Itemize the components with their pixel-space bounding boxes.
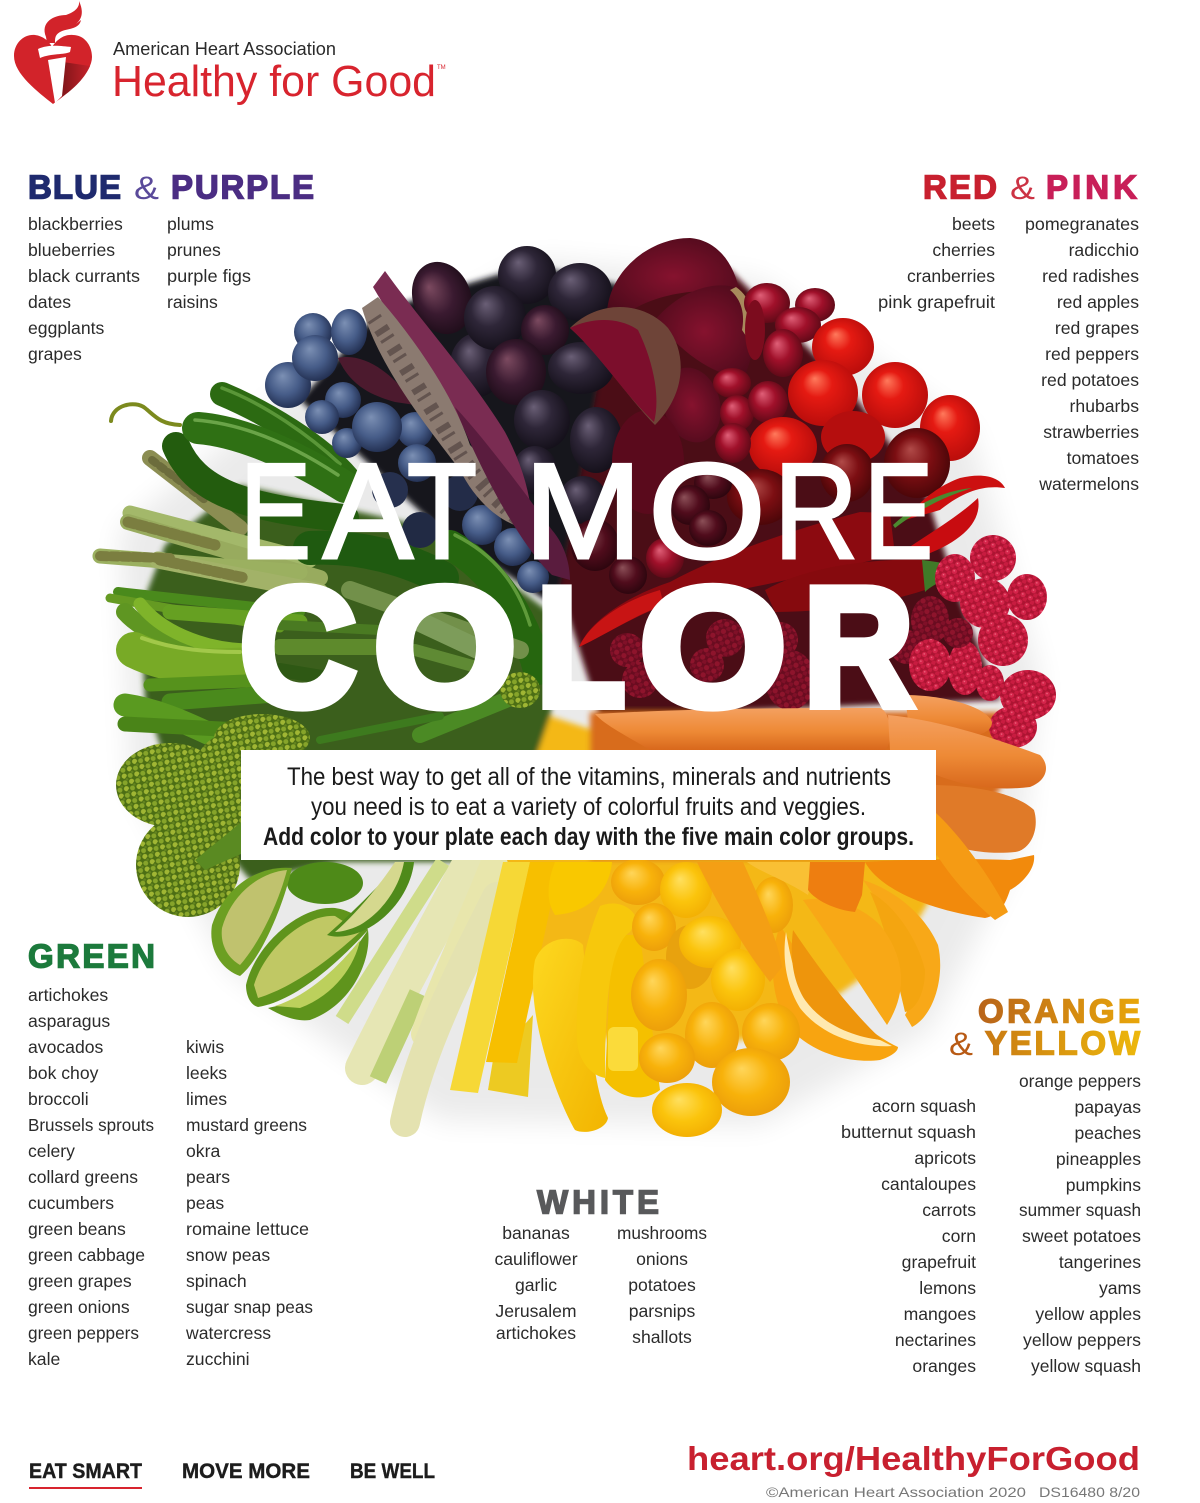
list column 2: tangerines — [1059, 1252, 1141, 1272]
logo — [14, 1, 446, 106]
list column 1: green grapes — [28, 1271, 132, 1291]
list column 2: orange peppers — [1019, 1071, 1141, 1091]
list column 1: cantaloupes — [881, 1174, 976, 1194]
list column 2: pumpkins — [1066, 1175, 1141, 1195]
list column 1 — [878, 214, 995, 312]
list column 2: yellow peppers — [1023, 1330, 1141, 1350]
footer — [29, 1440, 1140, 1500]
red chili peppers — [579, 476, 1005, 647]
list column 2: mushrooms — [617, 1223, 707, 1243]
list column 1: nectarines — [895, 1330, 976, 1350]
panel: produce circle — [100, 238, 1056, 1137]
title line: eat more — [240, 435, 933, 587]
raspberries — [610, 535, 1056, 748]
panel: white — [494, 1184, 707, 1347]
list column 1: blueberries — [28, 240, 115, 260]
list column 2: potatoes — [628, 1275, 696, 1295]
list column 2 — [185, 1037, 313, 1369]
list column 1 — [494, 1223, 578, 1343]
copyright: DS16480 8/20 — [1039, 1484, 1140, 1500]
orange peel and pepper piece — [697, 862, 865, 982]
panel: red and pink — [878, 168, 1139, 494]
list column 2: shallots — [632, 1327, 692, 1347]
list column 2: red apples — [1057, 292, 1139, 312]
list column 1: cherries — [932, 240, 995, 260]
heading: & — [949, 1026, 973, 1062]
beets — [570, 238, 754, 514]
list column 2 — [617, 1223, 707, 1347]
title — [240, 435, 933, 741]
icon: heart and torch — [14, 1, 92, 104]
list column 2: pears — [186, 1167, 230, 1187]
title line: eat more: E — [864, 435, 933, 587]
list column 2: okra — [186, 1141, 220, 1161]
list column 1: lemons — [919, 1278, 976, 1298]
list column 2: pineapples — [1056, 1149, 1141, 1169]
list column 2: radicchio — [1069, 240, 1139, 260]
title line: eat more: E — [240, 435, 311, 587]
base colors — [140, 265, 1000, 1060]
heading: PINK — [1046, 168, 1137, 206]
title line: eat more: A — [323, 435, 413, 587]
oranges — [773, 880, 940, 1061]
list column 2 — [167, 214, 251, 312]
list column 2: rhubarbs — [1070, 396, 1139, 416]
title line: eat more: R — [774, 435, 858, 587]
list column 1 — [28, 214, 140, 364]
list column 2: mustard greens — [186, 1115, 307, 1135]
list column 2: papayas — [1074, 1097, 1141, 1117]
list column 1: dates — [28, 292, 71, 312]
list column 2: spinach — [186, 1271, 247, 1291]
greens: broccoli — [116, 672, 540, 917]
title line: color: O — [640, 553, 786, 741]
list column 1: bok choy — [28, 1063, 99, 1083]
list column 1: green peppers — [28, 1323, 139, 1343]
list column 1: artichokes — [28, 985, 108, 1005]
list column 2: red grapes — [1055, 318, 1139, 338]
callout line 3: Add color to your plate each day with the five main color groups. — [263, 823, 914, 851]
list column 2: yellow apples — [1035, 1304, 1141, 1324]
lemongrass — [342, 862, 497, 1122]
list column 1: acorn squash — [872, 1096, 976, 1116]
heading: WHITE — [537, 1184, 659, 1220]
list column 2: sugar snap peas — [186, 1297, 313, 1317]
heading: BLUE — [28, 168, 121, 206]
title line: color: L — [537, 553, 625, 741]
list column 2: yellow squash — [1031, 1356, 1141, 1376]
website: heart.org/HealthyForGood — [687, 1440, 1140, 1477]
list column 1: green beans — [28, 1219, 126, 1239]
list column 1: beets — [952, 214, 995, 234]
panel: green — [28, 938, 313, 1369]
list column 2: snow peas — [186, 1245, 270, 1265]
list column 2: watercress — [185, 1323, 271, 1343]
heading — [949, 992, 1141, 1062]
panel: blue and purple — [28, 168, 314, 364]
list column 2: pomegranates — [1025, 214, 1139, 234]
list column 1: Brussels sprouts — [28, 1115, 154, 1135]
list column 1: Jerusalem — [495, 1301, 577, 1321]
list column 2 — [1025, 214, 1139, 494]
list column 2: zucchini — [186, 1349, 250, 1369]
heading: GREEN — [28, 938, 155, 974]
list column 2: strawberries — [1043, 422, 1139, 442]
list column 1: carrots — [922, 1200, 976, 1220]
list column 2: plums — [167, 214, 214, 234]
title line: eat more: T — [407, 435, 477, 587]
yellow peppers and strips — [450, 862, 660, 1132]
callout — [241, 750, 936, 860]
callout line 2: you need is to eat a variety of colorful fruits and veggies. — [311, 793, 866, 821]
list column 1: bananas — [502, 1223, 570, 1243]
list column 2 — [1019, 1071, 1141, 1376]
list column 1: cucumbers — [28, 1193, 114, 1213]
list column 2: prunes — [167, 240, 221, 260]
list column 1: mangoes — [904, 1304, 976, 1324]
heading: RED — [923, 168, 997, 206]
title line: color: R — [804, 553, 913, 741]
list column 1: blackberries — [28, 214, 123, 234]
list column 1: butternut squash — [841, 1122, 976, 1142]
purple carrots — [338, 271, 570, 580]
greens: asparagus — [100, 458, 320, 592]
limes — [211, 862, 414, 1020]
title line: color: C — [240, 553, 356, 741]
list column 2: sweet potatoes — [1022, 1226, 1141, 1246]
list column 1: collard greens — [28, 1167, 138, 1187]
list column 2: purple figs — [167, 266, 251, 286]
list column 2: summer squash — [1019, 1200, 1141, 1220]
shadow — [120, 260, 1040, 1125]
list column 2: kiwis — [186, 1037, 224, 1057]
list column 1: avocados — [28, 1037, 104, 1057]
wordmark: Healthy for Good — [112, 57, 436, 106]
list column 2: peas — [186, 1193, 224, 1213]
list column 1: oranges — [912, 1356, 976, 1376]
heading: & — [134, 170, 159, 206]
list column 2: watermelons — [1038, 474, 1139, 494]
list column 1: broccoli — [28, 1089, 89, 1109]
list column 1: pink grapefruit — [878, 292, 995, 312]
title line: eat more: M — [524, 435, 642, 587]
list column 1 — [841, 1096, 976, 1376]
list column 2: parsnips — [629, 1301, 695, 1321]
list column 1: asparagus — [28, 1011, 110, 1031]
list column 2: romaine lettuce — [186, 1219, 309, 1239]
list column 1: apricots — [914, 1148, 976, 1168]
list column 1: cranberries — [907, 266, 995, 286]
heading — [28, 168, 314, 206]
list column 1: corn — [942, 1226, 976, 1246]
heading: & — [1010, 170, 1035, 206]
list column 1: grapes — [28, 344, 82, 364]
list column 2: yams — [1099, 1278, 1141, 1298]
callout line 1: The best way to get all of the vitamins, minerals and nutrients — [287, 763, 891, 791]
list column 2: red peppers — [1045, 344, 1139, 364]
trademark: TM — [437, 65, 446, 71]
list column 1: celery — [28, 1141, 75, 1161]
orange peppers — [865, 812, 1034, 920]
list column 2: red potatoes — [1041, 370, 1139, 390]
list column 1 — [28, 985, 154, 1369]
title line: eat more: O — [648, 435, 766, 587]
list column 1: black currants — [28, 266, 140, 286]
organization name: American Heart Association — [113, 39, 336, 59]
tagline: move more: MOVE MORE — [182, 1460, 310, 1483]
copyright: ©American Heart Association 2020 — [766, 1484, 1026, 1500]
list column 1: green cabbage — [28, 1245, 145, 1265]
panel: orange and yellow — [841, 992, 1141, 1376]
list column 2: limes — [186, 1089, 227, 1109]
heading — [923, 168, 1137, 206]
list column 1: eggplants — [28, 318, 105, 338]
heading: PURPLE — [171, 168, 314, 206]
list column 2: raisins — [167, 292, 218, 312]
list column 1: cauliflower — [494, 1249, 578, 1269]
title line: color — [240, 553, 913, 741]
cranberries and tomatoes — [609, 283, 980, 594]
list column 1: kale — [28, 1349, 60, 1369]
blueberries and purple produce — [265, 246, 622, 593]
tagline: eat smart: EAT SMART — [29, 1460, 142, 1483]
list column 1: artichokes — [496, 1323, 576, 1343]
tagline: be well: BE WELL — [350, 1460, 435, 1483]
list column 2: peaches — [1074, 1123, 1141, 1143]
list column 1: garlic — [515, 1275, 557, 1295]
kumquats — [611, 859, 800, 1137]
list column 1: green onions — [28, 1297, 130, 1317]
carrots — [595, 695, 1046, 853]
copyright — [766, 1484, 1140, 1500]
greens: beans and snow peas — [110, 590, 520, 740]
list column 2: onions — [636, 1249, 688, 1269]
list column 2: leeks — [186, 1063, 227, 1083]
greens: jalapeno peppers — [111, 388, 538, 670]
title line: color: O — [374, 553, 516, 741]
heading: YELLOW — [985, 1024, 1141, 1062]
heading: ORANGE — [978, 992, 1140, 1030]
list column 1: grapefruit — [902, 1252, 976, 1272]
list column 2: tomatoes — [1067, 448, 1139, 468]
list column 2: red radishes — [1042, 266, 1139, 286]
